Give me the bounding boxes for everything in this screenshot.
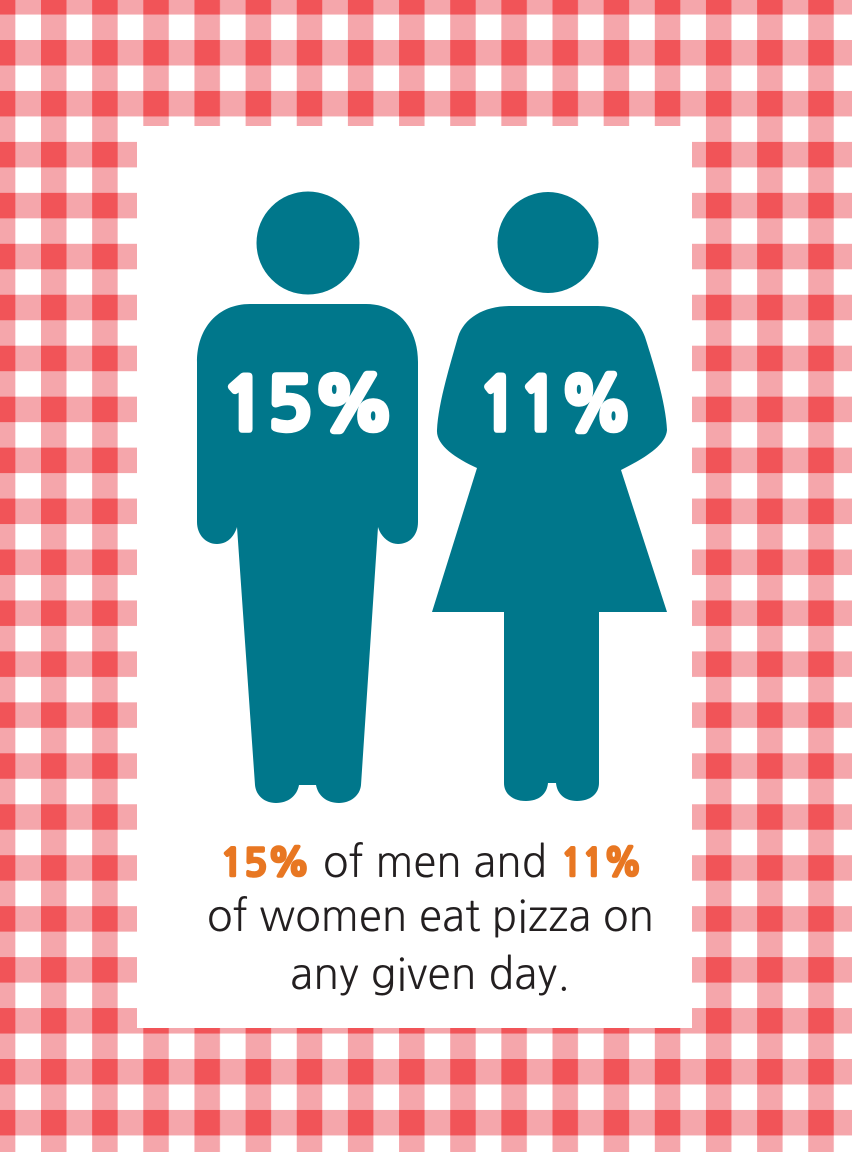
stat: 11%: 11% <box>478 369 633 441</box>
caption text <box>207 841 654 996</box>
caption: of women eat pizza on: of women eat pizza on <box>207 895 654 938</box>
woman head <box>498 192 598 293</box>
caption highlight: 15%: 15% <box>220 844 310 882</box>
woman body <box>432 306 667 801</box>
man head <box>256 192 360 294</box>
caption: of men and: of men and <box>323 841 547 884</box>
icon: man figure with 15% <box>197 192 418 803</box>
icon: woman figure with 11% <box>432 192 667 801</box>
caption highlight: 11%: 11% <box>561 844 642 882</box>
man body <box>197 304 418 803</box>
stat: 15%: 15% <box>221 369 395 441</box>
panel: white card <box>137 126 692 1028</box>
caption: any given day.: any given day. <box>290 953 570 996</box>
